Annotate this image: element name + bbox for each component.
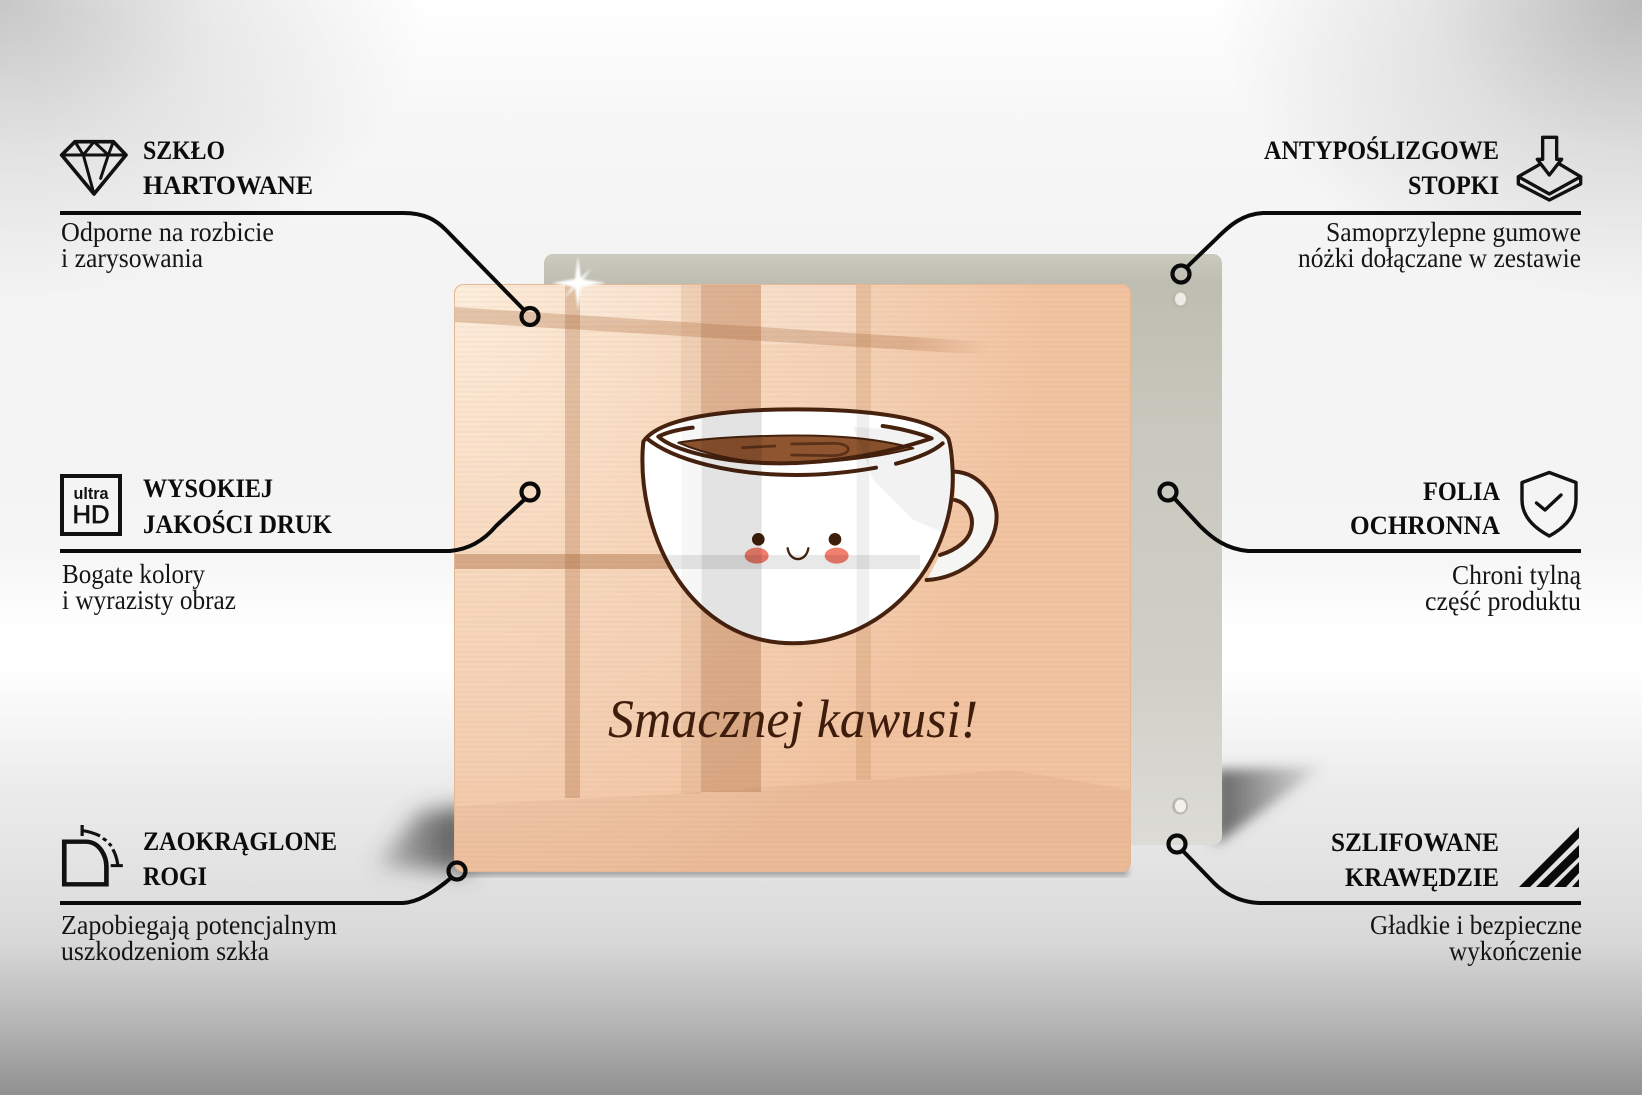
cup rim lines [647, 426, 943, 475]
shadow: left floor shadow [375, 806, 470, 872]
panel: front glass [454, 284, 1131, 872]
callout: zaokrąglone rogi [60, 825, 466, 966]
heading [1264, 136, 1499, 200]
shadow: under front panel [460, 868, 1128, 876]
callout: szkło hartowane [60, 136, 538, 325]
description: część produktu [1425, 586, 1581, 616]
heading: FOLIA [1423, 477, 1500, 506]
description [1425, 560, 1582, 616]
description: i zarysowania [61, 243, 203, 273]
heading [143, 827, 337, 891]
description: Odporne na rozbicie [61, 217, 274, 247]
description [61, 910, 337, 966]
heading [1331, 828, 1499, 892]
description: Chroni tylną [1452, 560, 1582, 590]
icon: ultra HD: ultra [74, 484, 109, 503]
description: Samoprzylepne gumowe [1326, 217, 1581, 247]
heading: WYSOKIEJ [143, 474, 273, 503]
description [61, 217, 274, 273]
icon: ultra HD: HD [72, 501, 110, 529]
icon: diamond [62, 142, 126, 194]
callout: antypoślizgowe stopki [1172, 136, 1581, 282]
description: Bogate kolory [62, 559, 205, 589]
description: wykończenie [1449, 936, 1582, 966]
callout: folia ochronna [1160, 472, 1582, 616]
heading: ROGI [143, 862, 207, 891]
rubber foot bottom [1172, 798, 1188, 814]
caption: cup slogan: Smacznej kawusi! [608, 689, 978, 749]
icon: glass sparkle [552, 256, 606, 310]
heading [143, 136, 313, 200]
connector [60, 213, 538, 325]
icon: press onto pad [1518, 137, 1581, 200]
icon: rounded corner [64, 825, 123, 884]
heading: SZLIFOWANE [1331, 828, 1499, 857]
description [1298, 217, 1581, 273]
heading [143, 474, 333, 539]
cup body [642, 409, 953, 643]
coffee surface [678, 436, 913, 463]
description: i wyrazisty obraz [62, 585, 236, 615]
rubber foot top [1172, 290, 1188, 308]
icon: ground edge stripes [1519, 827, 1579, 887]
callout: wysokiej jakości druk [60, 474, 538, 615]
description [1370, 910, 1582, 966]
connector [1168, 836, 1581, 903]
panel: back side of glass [544, 254, 1222, 845]
icon: shield [1522, 472, 1576, 536]
heading [1350, 477, 1500, 540]
heading: ZAOKRĄGLONE [143, 827, 337, 856]
cup handle [927, 472, 997, 580]
reflection on cup [666, 412, 951, 638]
description [62, 559, 236, 615]
heading: STOPKI [1408, 171, 1499, 200]
description: uszkodzeniom szkła [61, 936, 269, 966]
icon: ultra HD [62, 476, 120, 534]
connector [1172, 213, 1581, 282]
heading: HARTOWANE [143, 171, 313, 200]
heading: ANTYPOŚLIZGOWE [1264, 136, 1499, 165]
description: nóżki dołączane w zestawie [1298, 243, 1581, 273]
heading: JAKOŚCI DRUK [143, 510, 333, 539]
illustration: coffee cup [642, 409, 997, 643]
connector [1160, 484, 1581, 551]
heading: KRAWĘDZIE [1345, 863, 1499, 892]
cup face [745, 533, 849, 564]
connector [60, 484, 538, 551]
heading: SZKŁO [143, 136, 225, 165]
description: Zapobiegają potencjalnym [61, 910, 337, 940]
shadow: right floor shadow [1215, 766, 1325, 845]
window reflection [454, 284, 1131, 872]
description: Gładkie i bezpieczne [1370, 910, 1582, 940]
connector [60, 862, 466, 903]
heading: OCHRONNA [1350, 511, 1500, 540]
callout: szlifowane krawędzie [1168, 827, 1582, 966]
